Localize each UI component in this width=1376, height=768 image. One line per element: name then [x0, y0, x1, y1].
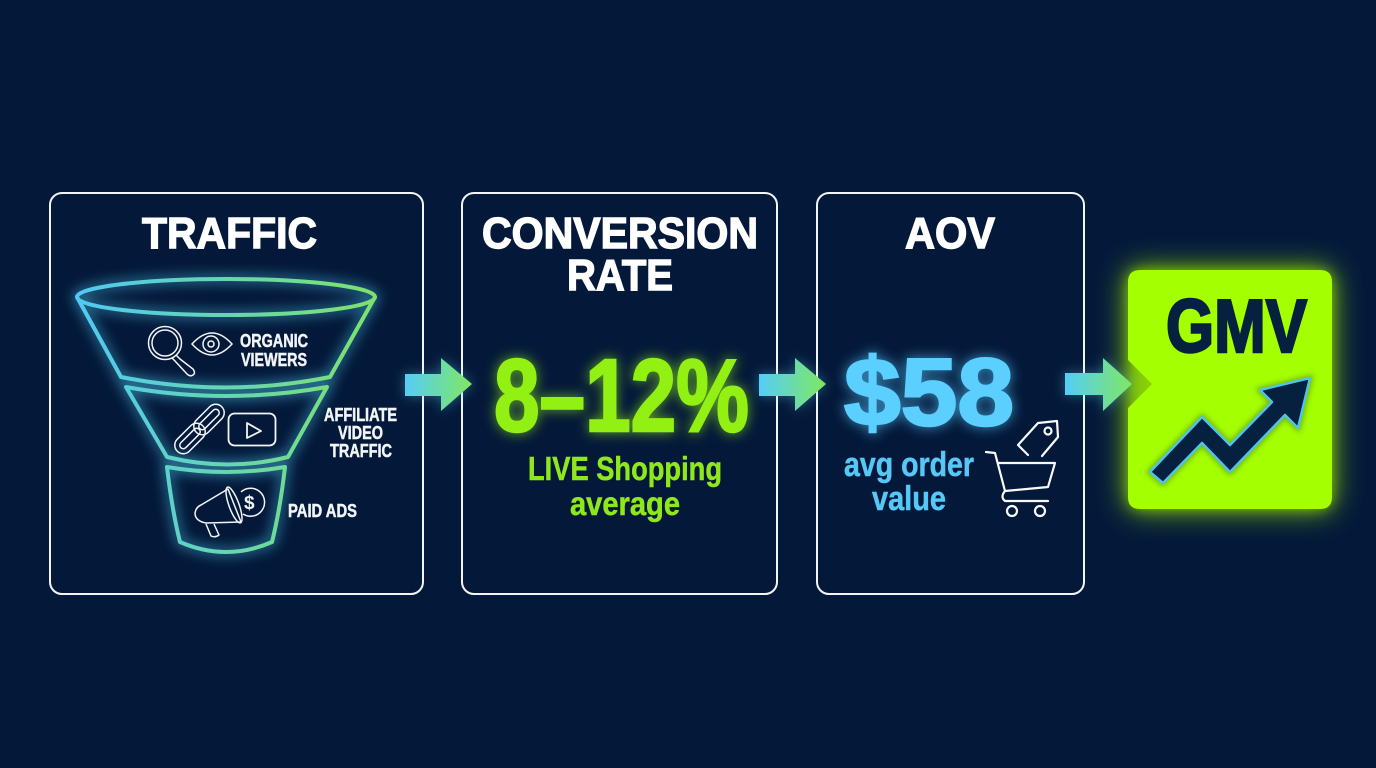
icon: magnifier: [148, 326, 194, 376]
funnel top section: [77, 297, 375, 388]
icon: shopping cart with tag: [986, 421, 1058, 516]
heading: conversion rate: CONVERSION: [482, 209, 758, 258]
funnel bottom section: [167, 467, 285, 552]
label: organic viewers: ORGANIC: [240, 331, 308, 351]
panel: traffic: [50, 193, 423, 594]
stat: $58: $58: [844, 339, 1014, 446]
funnel middle section: [126, 387, 327, 464]
icon: chain link: [171, 401, 228, 457]
funnel chart: [77, 279, 375, 552]
caption: avg order value: value: [872, 480, 946, 518]
icon: eye: [192, 333, 232, 355]
caption: live shopping average: LIVE Shopping: [528, 450, 722, 487]
caption: live shopping average: [528, 450, 722, 522]
label: paid ads: PAID ADS: [288, 501, 357, 521]
panel: gmv: [1126, 268, 1334, 511]
icon: megaphone with dollar: $: [244, 493, 255, 514]
label: affiliate video traffic: AFFILIATE: [324, 405, 397, 425]
stat: 8–12%: 8–12%: [494, 338, 749, 453]
icon: video player: [228, 414, 276, 446]
icon: megaphone with dollar: [195, 485, 265, 537]
stat: $58: $58: [844, 339, 1014, 446]
label: affiliate video traffic: VIDEO: [338, 423, 383, 443]
label: organic viewers: VIEWERS: [241, 350, 307, 370]
arrow: conversion to aov: [759, 358, 826, 411]
heading: aov: AOV: [905, 209, 996, 258]
heading: gmv: GMV: [1166, 284, 1307, 368]
stat: 8–12%: 8–12%: [494, 338, 749, 453]
heading: conversion rate: RATE: [567, 251, 673, 300]
arrow: aov to gmv: [1065, 358, 1132, 411]
caption: avg order value: avg order: [844, 446, 974, 484]
icon: trend arrow: [1150, 378, 1310, 483]
arrow: traffic to conversion: [405, 358, 472, 411]
panel: aov: [817, 193, 1084, 594]
heading: traffic: TRAFFIC: [142, 209, 317, 258]
label: organic viewers: [240, 331, 308, 370]
funnel rim: [77, 279, 375, 315]
heading: conversion rate: [482, 209, 758, 300]
caption: avg order value: [844, 446, 974, 518]
label: affiliate video traffic: [324, 405, 397, 461]
label: affiliate video traffic: TRAFFIC: [330, 441, 392, 461]
panel: conversion rate: [462, 193, 777, 594]
caption: live shopping average: average: [570, 485, 680, 522]
